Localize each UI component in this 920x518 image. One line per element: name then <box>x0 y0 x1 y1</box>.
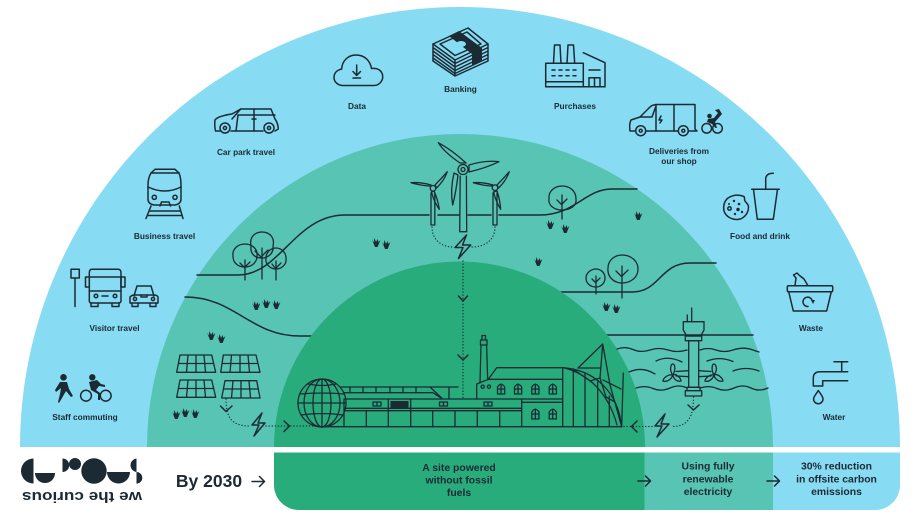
icon: delivery van and bike courier <box>630 104 722 136</box>
globe <box>298 379 346 427</box>
chimney <box>480 336 488 383</box>
label: water: Water <box>823 412 846 422</box>
label: deliveries from our shop: our shop <box>661 156 697 166</box>
icons: grass tufts <box>172 211 642 419</box>
icon: tidal turbine <box>617 308 768 396</box>
arrow: to renewable <box>638 476 650 486</box>
mill <box>477 368 563 427</box>
text: using fully renewable electricity: electricity <box>684 487 732 498</box>
low building <box>322 426 622 428</box>
text: a site powered without fossil fuels: without fossil <box>425 476 493 486</box>
icon: recycling bin with bottle <box>787 273 833 311</box>
arrow <box>252 476 264 486</box>
icon: cookie and cup with straw <box>724 173 779 220</box>
icon: trees left cluster <box>233 232 286 280</box>
icon: factory <box>546 45 605 87</box>
logo: we the curious <box>21 458 143 505</box>
arrow: to carbon <box>767 476 780 486</box>
icon: banknotes stack <box>433 28 488 76</box>
icon: staff commuting walker and cyclist <box>55 374 111 403</box>
label: staff commuting: Staff commuting <box>52 412 118 422</box>
inner semicircle: site without fossil fuels <box>274 262 645 447</box>
segment: renewable <box>644 452 773 510</box>
label: visitor travel: Visitor travel <box>89 323 140 333</box>
bottom timeline bar <box>274 452 900 510</box>
science centre building <box>298 336 623 427</box>
icon: bus stop, bus and car <box>71 269 158 306</box>
icon: tidal lightning and connector <box>621 397 699 437</box>
middle semicircle: renewable electricity <box>147 134 773 447</box>
text: 30 percent reduction: in offsite carbon <box>796 474 877 486</box>
text: 30 percent reduction: 30% reduction <box>801 462 872 472</box>
logo wordmark: we the curious <box>22 488 143 505</box>
icon: train <box>146 169 183 218</box>
icon: solar panels <box>177 355 260 398</box>
glass roof <box>563 368 622 427</box>
label: data: Data <box>348 101 366 111</box>
icon: cloud download <box>334 55 383 86</box>
icon: trees right pair <box>586 255 638 298</box>
icon: lightning and dotted connectors from turbines <box>432 227 495 398</box>
icon: wind turbines <box>411 143 509 232</box>
icon: solar lightning and connector <box>220 399 314 436</box>
label: food and drink: Food and drink <box>730 231 790 241</box>
segment: carbon <box>773 452 900 510</box>
text: using fully renewable electricity: renewable <box>683 474 734 486</box>
label: by 2030: By 2030 <box>176 471 242 491</box>
text: 30 percent reduction: emissions <box>811 487 862 498</box>
label: banking: Banking <box>444 84 477 94</box>
landscape hill lines <box>185 189 753 336</box>
icon: tree top right <box>549 186 576 219</box>
text: using fully renewable electricity: Using fully <box>681 462 735 472</box>
icon: car <box>215 109 278 133</box>
icon: tap with water drop <box>813 362 848 404</box>
label: car park travel: Car park travel <box>217 147 275 157</box>
label: deliveries from our shop: Deliveries from <box>649 146 709 156</box>
label: business travel: Business travel <box>134 231 195 241</box>
segment: fossil fuels <box>274 452 644 510</box>
text: a site powered without fossil fuels: A site powered <box>422 463 496 474</box>
text: a site powered without fossil fuels: fuels <box>447 488 471 499</box>
label: waste: Waste <box>799 323 823 333</box>
label: purchases: Purchases <box>554 101 596 111</box>
